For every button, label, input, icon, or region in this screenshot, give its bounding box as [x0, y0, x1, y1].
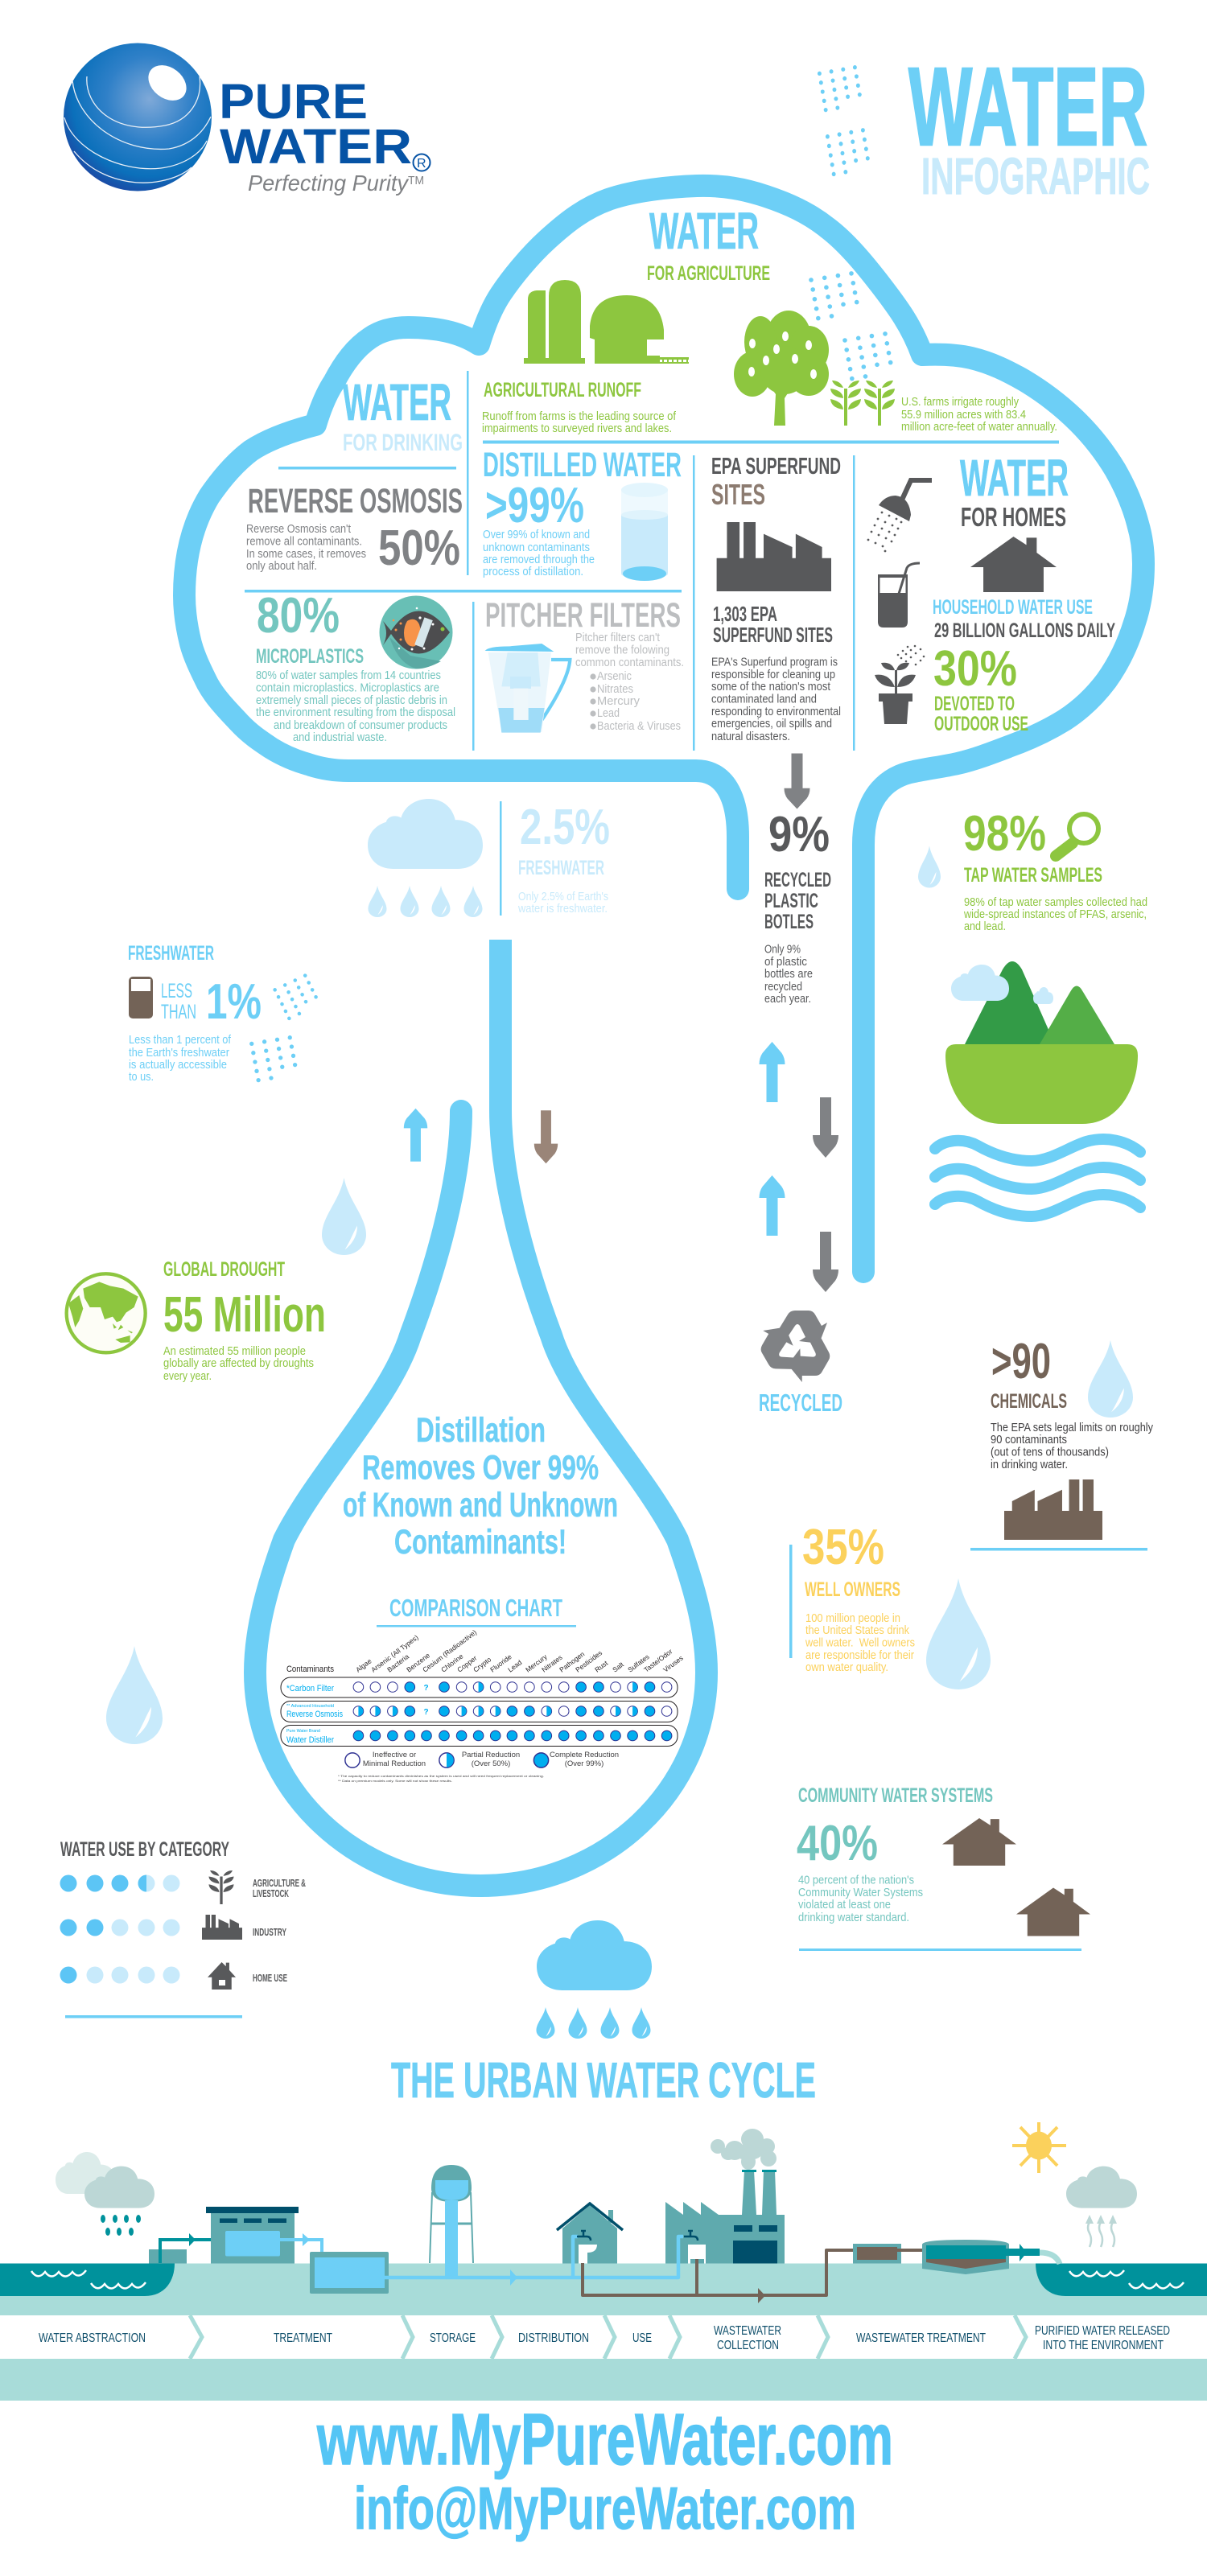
panel: water use by category [60, 1838, 306, 2018]
step labels: WASTEWATER [714, 2324, 781, 2338]
arrows: recycling flow [760, 1042, 838, 1292]
chart legend: Partial Reduction [462, 1751, 520, 1759]
panel: EPA superfund sites: natural disasters. [711, 730, 790, 743]
panel: distilled water: are removed through the [483, 553, 595, 566]
footer: website and email [316, 2400, 893, 2542]
panel: community water systems: COMMUNITY WATER SYSTEMS [798, 1784, 993, 1807]
panel: EPA superfund sites: some of the nation's most [711, 680, 831, 693]
logo wordmark: WATER [220, 119, 412, 174]
panel: microplastics: and breakdown of consumer products [274, 718, 447, 732]
step labels: WATER ABSTRACTION [39, 2331, 146, 2345]
chart row: carbon filter [353, 1682, 672, 1693]
rain clouds left [56, 2152, 154, 2236]
panel: 2.5% freshwater: FRESHWATER [518, 857, 604, 879]
chart footnotes [338, 1775, 544, 1783]
panel: reverse osmosis: remove all contaminants. [246, 534, 362, 549]
icon: pale rain cloud [368, 799, 483, 869]
chart footnotes: ** Data on premium models only. Some will not show these results. [338, 1780, 452, 1783]
chart row labels: Water Distiller [286, 1735, 334, 1745]
chart column headers: Lead [506, 1658, 524, 1674]
panel: distilled water: DISTILLED WATER [483, 446, 682, 484]
heading: distillation claim [343, 1411, 618, 1562]
panel: tap water samples: 98% [963, 806, 1046, 862]
chart legend: Minimal Reduction [363, 1759, 426, 1768]
chart column headers: Sulfates [626, 1652, 651, 1674]
wastewater treatment [853, 2240, 1060, 2274]
faucets [577, 2231, 698, 2241]
panel: freshwater less than 1%: Less than 1 percent of [129, 1033, 232, 1047]
chart legend: (Over 50%) [472, 1759, 510, 1768]
smoke [711, 2129, 777, 2170]
icon: house [970, 537, 1057, 592]
chart legend: Ineffective or [373, 1751, 416, 1759]
panel: freshwater less than 1%: to us. [129, 1070, 154, 1084]
panel: well owners: 35% [802, 1520, 884, 1575]
panel: 2.5% freshwater: water is freshwater. [517, 902, 608, 916]
chart row: reverse osmosis [353, 1706, 672, 1717]
panel: pitcher filters: Bacteria & Viruses [597, 719, 681, 733]
panel: community water systems: 40% [797, 1816, 878, 1871]
panel: 2.5% freshwater [368, 799, 610, 917]
text: irrigation stat: million acre-feet of water annually. [901, 420, 1057, 434]
panel: EPA superfund sites [711, 454, 841, 743]
panel: pitcher filters [485, 596, 684, 733]
text: irrigation stat: 55.9 million acres with 83.4 [901, 408, 1026, 422]
panel: well owners: own water quality. [805, 1660, 888, 1674]
illustration: mountains in bowl with waves [935, 961, 1140, 1216]
panel: EPA superfund sites: EPA's Superfund program is [711, 655, 838, 669]
panel: reverse osmosis: only about half. [246, 559, 317, 573]
chart column headers: Salt [611, 1660, 625, 1674]
panel: water for agriculture [482, 202, 1057, 435]
panel: community water systems: drinking water standard. [798, 1911, 909, 1924]
panel: tap water samples: TAP WATER SAMPLES [964, 864, 1102, 887]
step labels: INTO THE ENVIRONMENT [1043, 2339, 1164, 2352]
treatment plant [149, 2207, 322, 2264]
panel: EPA superfund sites: emergencies, oil spills and [711, 717, 832, 730]
panel: freshwater less than 1%: is actually accessible [129, 1058, 227, 1072]
icon: blue rain cloud [536, 1920, 652, 2039]
panel: well owners: the United States drink [805, 1623, 909, 1637]
heading: distillation claim: of Known and Unknown [343, 1486, 618, 1525]
panel: global drought: An estimated 55 million people [163, 1344, 306, 1358]
logo wordmark: R [417, 157, 426, 171]
panel: microplastics: 80% of water samples from 14 countries [256, 669, 441, 682]
panel: reverse osmosis: Reverse Osmosis can't [246, 522, 352, 536]
chart column headers: Copper [455, 1654, 479, 1674]
icon: water dots top [818, 65, 870, 176]
chart column headers: Fluoride [488, 1652, 513, 1674]
icon: pale drops [369, 886, 483, 917]
step labels: DISTRIBUTION [518, 2331, 589, 2345]
chart row: water distiller [353, 1730, 672, 1741]
arrow: down beside drop [534, 1110, 558, 1163]
step labels [39, 2324, 1170, 2352]
text: agricultural runoff [482, 379, 677, 435]
panel: recycled plastic bottles: recycled [764, 980, 802, 994]
panel: EPA superfund sites: contaminated land and [711, 692, 817, 706]
panel: recycled plastic bottles: each year. [764, 992, 811, 1006]
panel: water for homes: DEVOTED TO [934, 693, 1015, 715]
panel: pitcher filters: remove the folowing [575, 644, 669, 656]
icon: magnifier [1056, 814, 1098, 856]
icon: fruit tree [734, 311, 829, 426]
icon: drinking glass [878, 563, 920, 628]
panel: water for homes: 30% [933, 641, 1017, 697]
panel: reverse osmosis: 50% [378, 521, 460, 576]
panel: microplastics: the environment resulting from the disposal [256, 706, 455, 719]
panel: recycled plastic bottles: bottles are [764, 967, 813, 981]
icon: pale drop center left [322, 1178, 366, 1255]
chart row labels [286, 1684, 343, 1745]
heading: water for agriculture: FOR AGRICULTURE [647, 262, 770, 285]
heading: water for agriculture: WATER [649, 202, 759, 260]
storage tank [310, 2252, 389, 2294]
panel: freshwater less than 1%: the Earth's freshwater [129, 1046, 229, 1060]
row: agriculture [60, 1870, 306, 1904]
comparison chart [281, 1594, 685, 1783]
logo wordmark: TM [408, 174, 424, 187]
panel: freshwater less than 1%: 1% [206, 974, 262, 1030]
distribution pipes [385, 2237, 683, 2278]
panel: pitcher filters: common contaminants. [575, 656, 684, 669]
row: industry [60, 1915, 286, 1940]
panel: recycled plastic bottles: Only 9% [764, 943, 801, 956]
text: irrigation stat: U.S. farms irrigate roughly [901, 395, 1019, 409]
panel: well owners [789, 1520, 991, 1689]
panel: freshwater less than 1%: LESS [161, 980, 192, 1002]
footer: website and email: info@MyPureWater.com [354, 2475, 856, 2542]
panel: distilled water [483, 446, 682, 581]
step labels: COLLECTION [717, 2339, 779, 2352]
panel: microplastics: MICROPLASTICS [256, 645, 364, 668]
step labels: STORAGE [430, 2331, 476, 2345]
panel: 2.5% freshwater: Only 2.5% of Earth's [518, 890, 608, 903]
house [557, 2204, 623, 2264]
panel: microplastics [256, 588, 455, 744]
panel: tap water samples: and lead. [964, 920, 1006, 933]
row: home use: HOME USE [253, 1973, 287, 1984]
water bodies [0, 2264, 1207, 2296]
chart column headers: Benzene [405, 1651, 431, 1674]
chart legend: Complete Reduction [550, 1751, 619, 1759]
panel: distilled water: process of distillation. [483, 565, 583, 578]
panel: water for homes: HOUSEHOLD WATER USE [933, 596, 1093, 619]
panel: well owners: WELL OWNERS [805, 1578, 900, 1601]
arrow: down from superfund [784, 754, 809, 809]
panel: EPA superfund sites: responding to environmental [711, 705, 841, 718]
chart column headers: Taste/Odor [642, 1647, 674, 1674]
panel: 2.5% freshwater: 2.5% [520, 800, 610, 855]
panel: chemicals: >90 [991, 1334, 1051, 1389]
panel: freshwater less than 1% [128, 942, 322, 1084]
chart column headers: Crypto [472, 1655, 492, 1674]
panel: microplastics: contain microplastics. Microplastics are [256, 681, 439, 695]
water tower [430, 2165, 473, 2278]
chart row labels: *Carbon Filter [286, 1684, 334, 1693]
chart legend: (Over 99%) [565, 1759, 604, 1768]
panel: global drought: every year. [163, 1369, 212, 1383]
panel: chemicals: in drinking water. [991, 1458, 1068, 1471]
panel: community water systems: Community Water Systems [798, 1886, 923, 1899]
panel: community water systems: violated at least one [798, 1898, 891, 1911]
icon: brown factory [1004, 1479, 1102, 1540]
panel: global drought: globally are affected by droughts [163, 1356, 314, 1370]
heading: water for agriculture [647, 202, 770, 285]
panel: global drought: 55 Million [163, 1287, 326, 1343]
panel: tap water samples [918, 806, 1147, 933]
panel: EPA superfund sites: SUPERFUND SITES [713, 623, 833, 647]
icon: shower [867, 478, 932, 552]
panel: pitcher filters: Mercury [597, 694, 640, 708]
text: irrigation stat [901, 395, 1057, 434]
panel: reverse osmosis: In some cases, it removes [246, 547, 366, 561]
panel: tap water samples: wide-spread instances of PFAS, arsenic, [963, 907, 1147, 921]
chart column headers: Rust [593, 1659, 610, 1674]
teardrop outline [255, 940, 706, 1886]
panel: water use by category: WATER USE BY CATEGORY [60, 1838, 229, 1861]
panel: EPA superfund sites: responsible for cleaning up [711, 668, 835, 681]
icon: bottle [129, 977, 153, 1018]
heading: distillation claim: Contaminants! [394, 1523, 566, 1562]
footer: website and email: www.MyPureWater.com [316, 2400, 893, 2480]
chart legend [345, 1751, 619, 1768]
panel: distilled water: unknown contaminants [483, 541, 590, 554]
icon: water pitcher [485, 644, 570, 733]
icon: globe [67, 1274, 146, 1352]
panel: reverse osmosis: REVERSE OSMOSIS [248, 482, 463, 521]
panel: EPA superfund sites: 1,303 EPA [713, 602, 777, 626]
panel: water for homes: FOR HOMES [961, 502, 1066, 532]
chart column headers: Chlorine [439, 1652, 465, 1674]
panel: EPA superfund sites: EPA SUPERFUND [711, 454, 841, 479]
cloud outline with pipes [184, 186, 1143, 1272]
label: recycled: RECYCLED [759, 1389, 842, 1417]
panel: pitcher filters: Lead [597, 706, 620, 720]
panel: chemicals: (out of tens of thousands) [991, 1445, 1109, 1459]
chart column headers: Arsenic (All Types) [369, 1633, 420, 1674]
logo sphere [64, 43, 212, 191]
chart column headers: Bacteria [385, 1652, 410, 1674]
chart footnotes: * The capacity to reduce contaminants diminishes as the system is used and will need frequent replacement or cleaning. [338, 1775, 544, 1778]
panel: pitcher filters: Arsenic [597, 669, 632, 683]
chart row labels: Reverse Osmosis [286, 1710, 343, 1719]
logo wordmark [219, 74, 430, 195]
row: agriculture: LIVESTOCK [253, 1888, 289, 1899]
panel: distilled water: Over 99% of known and [483, 528, 590, 541]
text: agricultural runoff: AGRICULTURAL RUNOFF [484, 379, 641, 401]
icon: large pale drop left [106, 1646, 163, 1744]
heading: distillation claim: Distillation [416, 1411, 546, 1450]
logo: Pure Water [64, 43, 430, 195]
panel: tap water samples: 98% of tap water samples collected had [964, 895, 1147, 909]
panel: pitcher filters: Nitrates [597, 682, 633, 696]
chart column headers: Viruses [661, 1654, 685, 1674]
panel: water for drinking: WATER [343, 373, 451, 431]
logo wordmark: Perfecting Purity [248, 171, 410, 195]
chart column headers: Contaminants [286, 1665, 334, 1674]
panel: freshwater less than 1%: FRESHWATER [128, 942, 214, 965]
wave lines [31, 2270, 1184, 2288]
panel: reverse osmosis [246, 482, 463, 576]
panel: chemicals: CHEMICALS [991, 1390, 1067, 1413]
panel: recycled plastic bottles: 9% [768, 807, 830, 862]
panel: recycled plastic bottles: RECYCLED [764, 869, 831, 891]
row: industry: INDUSTRY [253, 1927, 286, 1938]
panel: microplastics: 80% [257, 588, 340, 644]
factory [665, 2129, 785, 2264]
chart row: reverse osmosis: ? [423, 1708, 429, 1717]
panel: water for drinking [343, 373, 463, 456]
text: agricultural runoff: impairments to surveyed rivers and lakes. [482, 422, 672, 435]
evaporation cloud [1066, 2167, 1137, 2247]
wastewater pipes [583, 2250, 928, 2295]
chart column headers: Pathogen [558, 1650, 586, 1674]
panel: water for homes [867, 449, 1115, 735]
row: agriculture: AGRICULTURE & [253, 1878, 306, 1889]
panel: EPA superfund sites: SITES [711, 478, 765, 511]
panel: pitcher filters: PITCHER FILTERS [485, 596, 681, 635]
panel: water for homes: WATER [960, 449, 1069, 507]
sun [1012, 2122, 1066, 2173]
chart row frames [281, 1677, 678, 1746]
panel: pitcher filters: Pitcher filters can't [575, 631, 661, 644]
arrow: up beside drop [404, 1109, 427, 1162]
panel: chemicals: The EPA sets legal limits on roughly [991, 1421, 1153, 1434]
chart column headers: Pesticides [574, 1648, 604, 1674]
logo wordmark: PURE [219, 74, 368, 129]
panel: distilled water: >99% [485, 478, 584, 533]
panel: microplastics: extremely small pieces of plastic debris in [256, 693, 447, 707]
comparison chart: COMPARISON CHART [389, 1594, 562, 1622]
chart column headers: Nitrates [540, 1653, 564, 1674]
icon: recycle symbol [752, 1311, 837, 1389]
chart column headers: Mercury [524, 1652, 549, 1674]
step labels: USE [632, 2331, 652, 2345]
panel: water for homes: 29 BILLION GALLONS DAILY [934, 619, 1115, 642]
heading: distillation claim: Removes Over 99% [362, 1449, 599, 1488]
dividers inside cloud [245, 371, 1059, 751]
panel: recycled plastic bottles: PLASTIC [764, 890, 818, 912]
icon: glass of water [621, 483, 668, 581]
icon: fish with plastics [380, 595, 452, 669]
panel: recycled plastic bottles [764, 807, 831, 1006]
step labels: TREATMENT [274, 2331, 332, 2345]
chart column headers: Algae [354, 1656, 373, 1674]
panel: recycled plastic bottles: of plastic [764, 955, 807, 969]
row: home use [60, 1962, 287, 1990]
icon: rain dots [809, 271, 893, 381]
panel: water for homes: OUTDOOR USE [934, 713, 1028, 735]
title: Water Infographic [908, 45, 1150, 205]
panel: microplastics: and industrial waste. [293, 730, 387, 744]
icon: potted plant [875, 645, 925, 724]
icon: silos and barn [524, 280, 689, 364]
icon: factory [717, 522, 831, 591]
panel: recycled plastic bottles: BOTLES [764, 911, 814, 933]
diagram: urban water cycle [0, 2122, 1207, 2401]
chart row labels: ** Advanced Household [286, 1704, 334, 1709]
icon: sprouts [830, 381, 895, 426]
panel: global drought: GLOBAL DROUGHT [163, 1258, 285, 1281]
panel: community water systems [797, 1784, 1090, 1951]
panel: well owners: well water. Well owners [805, 1636, 915, 1649]
panel: chemicals [970, 1334, 1153, 1551]
chart row labels: Pure Water Brand [286, 1729, 320, 1734]
panel: well owners: 100 million people in [805, 1611, 900, 1625]
step labels: WASTEWATER TREATMENT [856, 2331, 986, 2345]
panel: community water systems: 40 percent of the nation's [798, 1874, 914, 1887]
panel: chemicals: 90 contaminants [991, 1433, 1067, 1446]
panel: freshwater less than 1%: THAN [161, 1001, 196, 1023]
panel: global drought [67, 1258, 326, 1383]
ground band [0, 2264, 1207, 2401]
text: agricultural runoff: Runoff from farms is the leading source of [482, 409, 677, 423]
chart column headers [286, 1628, 685, 1674]
chart column headers: Cesium (Radioactive) [421, 1628, 478, 1674]
chart row: carbon filter: ? [423, 1684, 429, 1693]
heading: the urban water cycle: THE URBAN WATER CYCLE [391, 2053, 816, 2109]
panel: water for drinking: FOR DRINKING [343, 430, 463, 456]
step separators [190, 2315, 1026, 2359]
panel: well owners: are responsible for their [805, 1648, 914, 1662]
